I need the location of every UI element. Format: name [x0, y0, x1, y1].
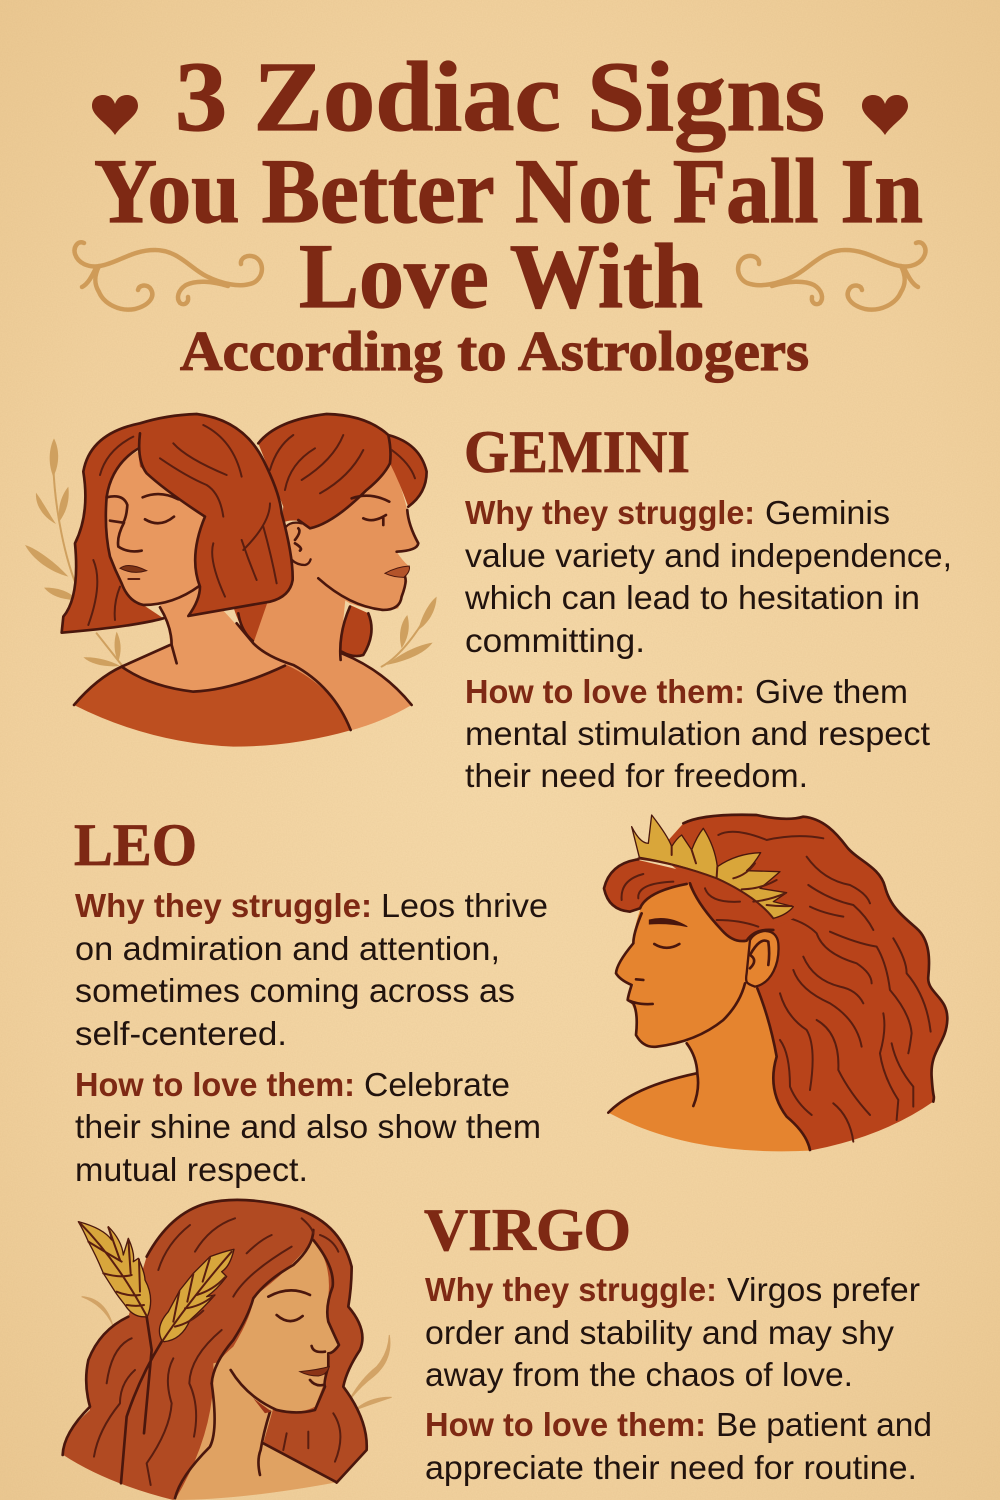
- Leo face: [617, 880, 753, 1047]
- right twin face: [282, 463, 418, 610]
- why they struggle text: [75, 887, 548, 1052]
- why they struggle text: self-centered.: [75, 1015, 287, 1052]
- heading: Gemini: GEMINI: [464, 419, 690, 485]
- why they struggle text: which can lead to hesitation in: [464, 579, 920, 616]
- heading: Leo: LEO: [74, 812, 197, 878]
- icon: left heart: [92, 95, 138, 135]
- how to love them text: Be patient and: [716, 1406, 932, 1443]
- left wheat ear: [78, 1222, 151, 1317]
- subtitle: According to Astrologers: [180, 321, 809, 383]
- how to love them text: mental stimulation and respect: [465, 715, 930, 752]
- title block: [75, 41, 925, 383]
- how to love them text: appreciate their need for routine.: [425, 1449, 917, 1486]
- sprigs behind the twins: [25, 438, 437, 667]
- Leo front hair curl: [604, 860, 793, 941]
- illustration: Leo with laurel crown: [604, 815, 947, 1151]
- why they struggle text: [464, 494, 952, 659]
- how to love them text: [465, 673, 930, 794]
- how to love them text: [75, 1066, 541, 1188]
- right twin neck and shoulder: [253, 557, 412, 731]
- left twin neck: [122, 585, 287, 692]
- sprigs behind Virgo: [82, 1297, 392, 1410]
- why they struggle text: away from the chaos of love.: [425, 1356, 853, 1393]
- right twin hair: [258, 414, 427, 528]
- icon: right heart: [862, 95, 908, 135]
- illustration: Gemini twins: [25, 414, 437, 747]
- left twin hair: [62, 414, 293, 633]
- panel: Gemini text: [464, 419, 952, 794]
- why they struggle text: Leos thrive: [381, 887, 548, 924]
- Virgo neck and shoulder: [175, 1357, 335, 1500]
- Leo hair: [657, 815, 947, 1151]
- illustration: Virgo with wheat: [63, 1200, 392, 1500]
- panel: Virgo text: [424, 1197, 932, 1486]
- how to love them text: mutual respect.: [75, 1151, 308, 1188]
- Virgo hair: [63, 1200, 367, 1500]
- title line 1: 3 Zodiac Signs: [175, 41, 825, 152]
- why they struggle text: order and stability and may shy: [425, 1314, 895, 1351]
- why they struggle text: Why they struggle:: [465, 494, 755, 531]
- heading: Virgo: VIRGO: [424, 1197, 631, 1263]
- why they struggle text: [425, 1271, 920, 1393]
- Leo laurel crown: [632, 815, 793, 918]
- Virgo hair strands: [94, 1218, 340, 1485]
- Virgo eye nose mouth: [268, 1290, 325, 1352]
- why they struggle text: on admiration and attention,: [75, 930, 500, 967]
- how to love them text: How to love them:: [425, 1406, 706, 1443]
- how to love them text: their need for freedom.: [465, 757, 808, 794]
- left ornament flourish: [75, 242, 262, 310]
- right ornament flourish: [738, 242, 925, 310]
- why they struggle text: value variety and independence,: [465, 537, 952, 574]
- how to love them text: [425, 1406, 932, 1486]
- how to love them text: How to love them:: [75, 1066, 355, 1103]
- Leo ear: [746, 931, 779, 987]
- left twin eyes nose mouth: [107, 494, 178, 551]
- panel: Leo text: [74, 812, 548, 1188]
- wheat stalks: [121, 1317, 162, 1483]
- title line 3: Love With: [299, 225, 703, 327]
- why they struggle text: Why they struggle:: [425, 1271, 717, 1308]
- how to love them text: their shine and also show them: [75, 1108, 541, 1145]
- why they struggle text: Why they struggle:: [75, 887, 372, 924]
- why they struggle text: Geminis: [765, 494, 890, 531]
- why they struggle text: Virgos prefer: [727, 1271, 920, 1308]
- Virgo face: [213, 1240, 338, 1412]
- right twin eye and mouth: [352, 496, 389, 525]
- left twin shirt: [74, 665, 352, 747]
- left twin face: [106, 450, 205, 605]
- why they struggle text: sometimes coming across as: [75, 972, 515, 1009]
- how to love them text: Celebrate: [364, 1066, 510, 1103]
- Leo eye nose mouth: [649, 918, 687, 927]
- title line 2: You Better Not Fall In: [94, 140, 923, 242]
- right wheat ear: [159, 1249, 234, 1342]
- left twin: [62, 414, 352, 747]
- Leo shoulder and neck: [608, 967, 810, 1151]
- right twin ear: [282, 523, 311, 565]
- why they struggle text: committing.: [465, 622, 645, 659]
- how to love them text: Give them: [755, 673, 908, 710]
- how to love them text: How to love them:: [465, 673, 745, 710]
- right twin: [233, 414, 427, 731]
- right twin hair behind: [233, 597, 372, 656]
